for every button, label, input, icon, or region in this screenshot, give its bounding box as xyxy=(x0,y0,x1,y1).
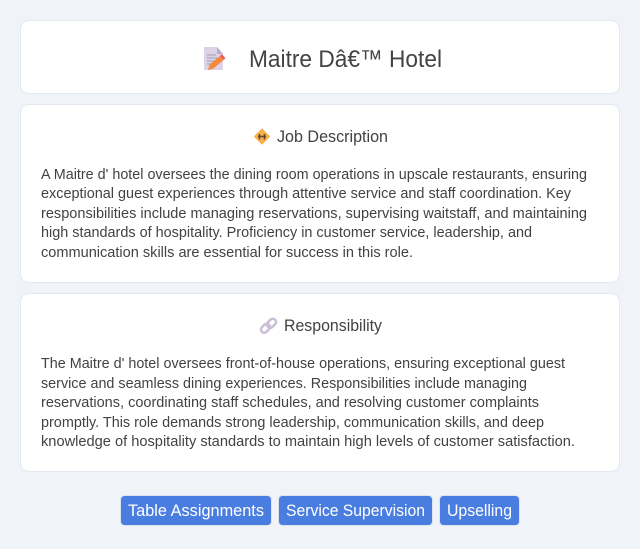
text block: responsibility: service and seamless dining experiences. Responsibilities include managing xyxy=(41,376,527,392)
text block: job description xyxy=(41,167,587,261)
text block: job description: communication skills are essential for success in this role. xyxy=(41,245,413,261)
text block: responsibility xyxy=(41,356,575,450)
tag: table assignments xyxy=(120,496,272,526)
text block: responsibility: reservations, coordinating staff schedules, and resolving customer complaints xyxy=(41,395,539,411)
tag: upselling: Upselling xyxy=(447,502,512,520)
text block: responsibility: The Maitre d' hotel oversees front-of-house operations, ensuring exceptional guest xyxy=(41,356,565,372)
tag: upselling xyxy=(440,496,520,526)
text block: job description: responsibilities include managing reservations, supervising waitstaff, and maintaining xyxy=(41,206,587,222)
text block: responsibility: promptly. This role demands strong leadership, communication skills, and deep xyxy=(41,415,544,431)
icon: diamond sign xyxy=(254,129,270,144)
tag: service supervision xyxy=(278,496,432,526)
panel: title card xyxy=(20,20,620,94)
heading: responsibility: Responsibility xyxy=(284,317,383,335)
text block: job description: exceptional guest experiences through attentive service and staff coordination. Key xyxy=(41,186,572,202)
text block: responsibility: knowledge of hospitality standards to maintain high levels of customer satisfaction. xyxy=(41,434,575,450)
tag: table assignments: Table Assignments xyxy=(128,502,264,520)
title: Maitre Dâ€™ Hotel xyxy=(249,46,442,73)
panel: job description xyxy=(20,104,620,282)
icon: chain link xyxy=(260,317,277,334)
text block: job description: high standards of hospitality. Proficiency in customer service, leadership, and xyxy=(41,225,532,241)
tag: service supervision: Service Supervision xyxy=(286,502,425,520)
panel: responsibility xyxy=(20,294,620,472)
heading: job description: Job Description xyxy=(277,128,388,146)
icon: document with pencil xyxy=(204,47,226,70)
text block: job description: A Maitre d' hotel oversees the dining room operations in upscale restaurants, ensuring xyxy=(41,167,587,183)
